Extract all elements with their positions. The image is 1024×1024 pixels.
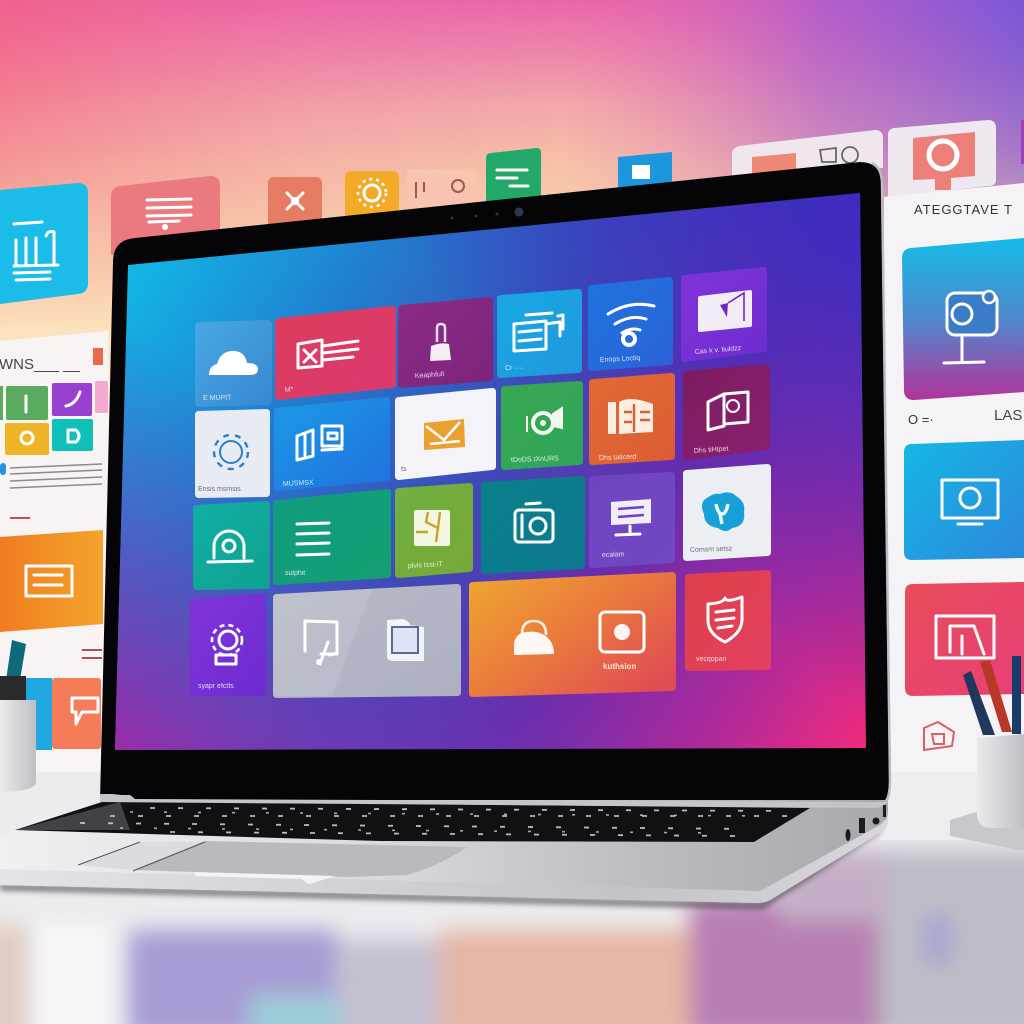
label row [908,407,1022,427]
tile: white blob [683,464,771,561]
tile: teal camera [481,476,585,574]
tile: green camera: tDoDS tXnURS [511,455,559,464]
icon: yellow sun card [345,171,399,231]
lid silver edge [872,163,890,802]
tile: plum brush [398,297,493,388]
trackpad [78,841,467,877]
sheet: right white page [884,183,1024,772]
icon: monitor card [904,440,1024,560]
tile: red shield [685,570,771,671]
icon: white wide card [732,130,883,182]
icon: blue card [618,152,672,196]
icon: green card [486,148,541,203]
tile: blue layers: Cr ···· [505,365,524,372]
tile: purple gear: syapr efctfs [198,683,234,690]
tile: plum brush: Keaphfull [415,371,445,380]
text lines [10,464,102,488]
small tile grid [0,381,108,455]
tile: video: Cas k v. tiuldzz [695,345,742,356]
tile: gray large [273,584,461,698]
icon: small cyan and coral cards [25,678,101,750]
icon: white card with red lens [888,120,996,198]
app tile grid [190,267,771,698]
tile: red shield: vecqopan [696,656,726,663]
label row: LAS [994,407,1022,424]
tile: orange book: Dhs taticerd [599,454,637,462]
icon: orange list card [0,530,103,632]
tile: white mail [395,388,496,480]
top row of floating icons [111,120,1024,255]
pen cup right [950,656,1024,850]
label row: O =· [908,412,934,427]
icon: camera card [902,238,1024,400]
background gradient [0,0,1024,772]
tile: video [681,267,767,362]
laptop base [0,795,888,906]
icon: pale card [407,169,477,219]
icon: red gear card [268,177,322,237]
tile: maroon frame [683,364,770,460]
shadow under base [0,828,880,906]
tile: green list: sulphit [285,570,305,577]
tile: white blob: Comsm setsz [690,546,733,554]
tile: lime puzzle: plvis tsst-iT [408,561,444,570]
tile: wifi [588,277,673,371]
hinge highlight [100,794,888,808]
tile: blue docs [274,397,390,491]
tile: teal target [193,501,270,590]
label: WNS___ __ [0,356,81,373]
tile: violet screen: ecalam [602,551,625,559]
tile: maroon frame: Dhs tiHtpet [694,446,729,455]
laptop [0,162,890,906]
tile: blue docs: MUSMSX [283,479,314,488]
tile: orange wide: kuthsion [603,662,636,671]
tile: white mail: ts [401,466,407,473]
tile: purple gear [190,594,266,696]
icon: small red outline [924,722,954,750]
tile: red media [275,306,396,400]
pen cup left [0,640,36,792]
left panel of floating cards [0,183,108,751]
tile: red media: M* [285,386,294,394]
tile: white gear [195,409,270,498]
icon: red frame card [905,582,1024,696]
webcam [450,208,524,220]
icon: red list card [111,176,220,255]
laptop screen [115,193,866,750]
side ports [846,805,886,841]
tile: lime puzzle [395,483,473,578]
tile: orange book [589,373,675,465]
floor with reflections [0,772,1024,1024]
tile: white gear: Ensis msmsis [198,486,241,493]
icon: cyan chart card [0,183,88,304]
tile: orange wide [469,572,676,697]
tile: cloud: E MUPIT [203,394,232,402]
tile: blue layers [497,289,582,378]
tile: cloud [195,320,272,407]
label: ATEGGTAVE T [914,202,1013,217]
sheet: left white page [0,331,108,751]
keyboard [15,801,810,842]
tile: wifi: Enops Loctiq [600,355,641,364]
tile: green camera [501,381,583,470]
tile: green list [273,489,391,585]
right panel of floating cards [884,183,1024,772]
icon: purple sliver [1021,120,1024,164]
laptop lid bezel [100,162,889,800]
tile: violet screen [589,472,675,568]
front lip [0,817,888,903]
